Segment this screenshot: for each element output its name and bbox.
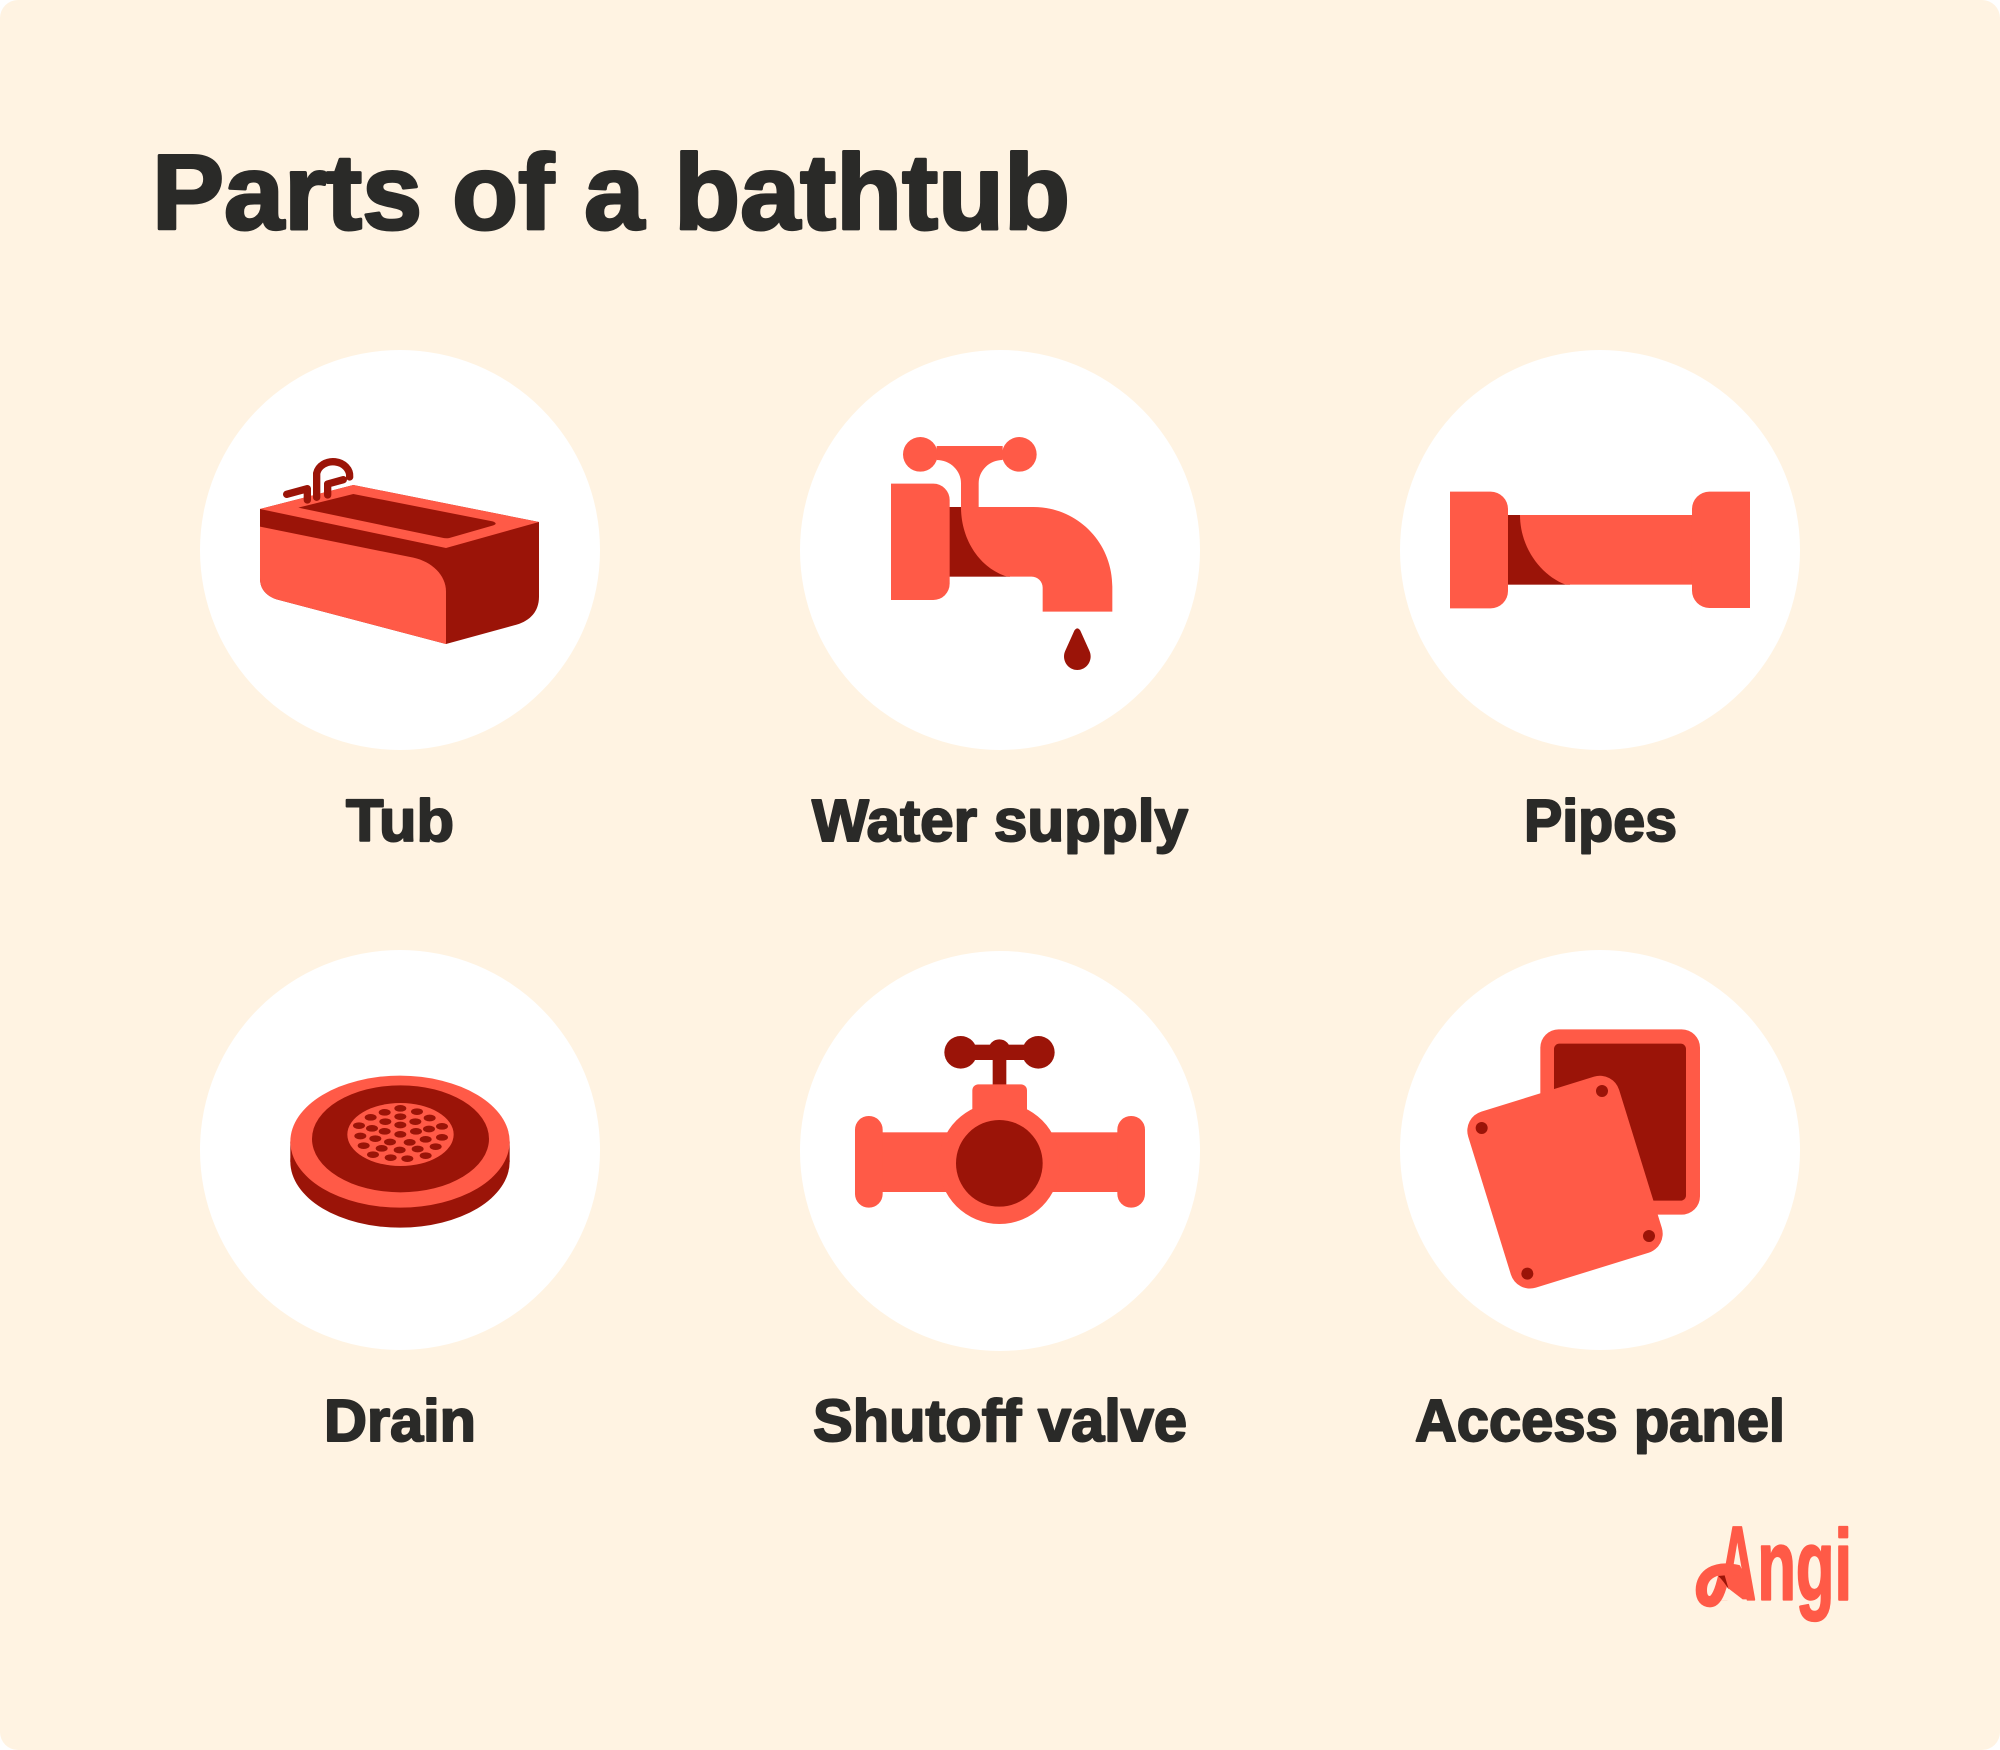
label: Tub: Tub	[346, 788, 454, 854]
icon: bathtub	[260, 462, 539, 644]
panel: pipes	[1400, 350, 1800, 854]
logo: Angi: ngi	[1757, 1509, 1852, 1621]
icon: valve	[855, 1036, 1145, 1224]
access panel circle	[1400, 950, 1800, 1350]
panel: access panel	[1400, 950, 1800, 1454]
panel: shutoff valve	[800, 951, 1200, 1454]
title: Parts of a bathtub	[152, 132, 1070, 252]
icon: drain	[290, 1076, 510, 1228]
logo: Angi	[1701, 1505, 1852, 1622]
label: Shutoff valve: Shutoff valve	[813, 1388, 1187, 1454]
icon: pipe	[1450, 492, 1750, 608]
panel: tub	[200, 350, 600, 854]
panel: drain	[200, 950, 600, 1454]
pipes circle	[1400, 350, 1800, 750]
icon: access panel	[1462, 1029, 1700, 1294]
label: Drain: Drain	[324, 1388, 476, 1454]
logo: Angi: A	[1719, 1505, 1756, 1622]
water supply circle	[800, 350, 1200, 750]
tub circle	[200, 350, 600, 750]
label: Access panel: Access panel	[1415, 1388, 1785, 1454]
label: Pipes: Pipes	[1524, 788, 1677, 854]
drain circle	[200, 950, 600, 1350]
panel: water supply	[800, 350, 1200, 854]
label: Water supply: Water supply	[812, 788, 1188, 854]
shutoff valve circle	[800, 951, 1200, 1351]
icon: faucet	[891, 437, 1112, 670]
